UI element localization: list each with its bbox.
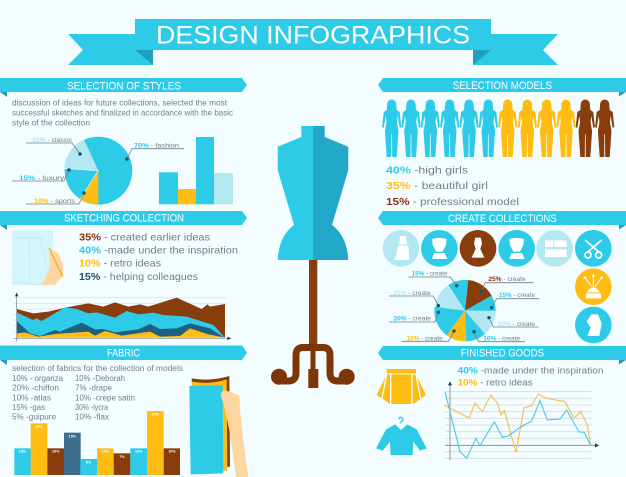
heading ribbon: finished goods: FINISHED GOODS bbox=[461, 348, 544, 360]
pie chart: create: 15% - create bbox=[412, 271, 448, 278]
bar chart: fabrics: 10% bbox=[135, 449, 143, 453]
bar chart: fabrics: 10% bbox=[19, 449, 27, 453]
heading ribbon: fabric: FABRIC bbox=[107, 348, 140, 360]
bar chart: fabrics: 10% bbox=[52, 449, 60, 453]
fabric list: 10% - organza bbox=[12, 374, 64, 383]
fabric list: 10% -crepe satin bbox=[75, 393, 135, 402]
pie chart: create: 25% - create bbox=[488, 276, 526, 283]
panel: selection models bbox=[378, 78, 626, 208]
pie chart: styles: 15% - luxury bbox=[19, 175, 65, 182]
percentages list: 10% - retro ideas bbox=[79, 259, 161, 270]
bar chart: fabrics: 10% bbox=[168, 449, 176, 453]
pie chart: styles: 70% - fashion bbox=[134, 142, 179, 150]
percentages list: 15% - helping colleagues bbox=[79, 272, 198, 283]
icon: skirt bbox=[377, 369, 426, 404]
title: DESIGN INFOGRAPHICS bbox=[156, 22, 470, 50]
heading ribbon: create collections bbox=[378, 211, 626, 230]
stacked area chart bbox=[13, 292, 231, 342]
models percentages: 35% - beautiful girl bbox=[386, 180, 488, 192]
bar chart: fabrics: 30% bbox=[152, 412, 160, 416]
bar chart: fabrics: 20% bbox=[35, 425, 43, 429]
panel: create collections bbox=[378, 211, 626, 343]
bar chart: styles bbox=[159, 137, 233, 204]
heading ribbon: selection models: SELECTION MODELS bbox=[453, 80, 552, 92]
bar chart: fabrics: 5% bbox=[86, 460, 92, 464]
fabric list bbox=[12, 364, 183, 422]
heading ribbon: selection models bbox=[378, 78, 626, 96]
figures row bbox=[382, 100, 614, 157]
pie chart: create: 20% - create bbox=[498, 321, 535, 328]
fabric list: 5% -guipure bbox=[12, 413, 57, 422]
fabric list: 10% -atlas bbox=[12, 393, 51, 402]
title ribbon bbox=[68, 19, 558, 65]
fabric list: 7% -drape bbox=[75, 384, 113, 393]
panel: fabric bbox=[0, 346, 248, 477]
bar chart: fabrics: 10% bbox=[102, 449, 110, 453]
pie chart: create: 10% - create bbox=[483, 335, 520, 342]
bar chart: fabrics bbox=[14, 411, 180, 475]
fabric list: 15% -gas bbox=[12, 403, 45, 412]
pie chart: create: 15% - create bbox=[499, 292, 535, 299]
pie chart: create: 20% - create bbox=[393, 316, 431, 323]
line chart bbox=[444, 381, 599, 460]
pie chart: create: 25% - create bbox=[393, 290, 431, 297]
models percentages: 15% - professional model bbox=[386, 196, 519, 208]
pie chart: styles: 15% - classic bbox=[32, 137, 73, 144]
percentages list: 40% -made under the inspiration bbox=[79, 246, 238, 257]
finished goods percentages: 10% - retro ideas bbox=[458, 377, 533, 388]
bar chart: fabrics: 7% bbox=[119, 455, 125, 459]
finished goods percentages: 40% -made under the inspiration bbox=[458, 365, 604, 376]
heading ribbon: finished goods bbox=[378, 346, 626, 364]
fabric list: 10% -Deborah bbox=[75, 374, 125, 383]
pie chart: create bbox=[389, 271, 539, 342]
panel: sketching collection bbox=[0, 211, 247, 342]
panel: finished goods bbox=[376, 346, 626, 460]
models percentages bbox=[386, 164, 519, 208]
description text: successful sketches and finalized in accordance with the basic bbox=[12, 108, 233, 118]
finished goods percentages bbox=[458, 365, 604, 388]
mannequin bbox=[271, 126, 355, 388]
pie chart: styles bbox=[12, 137, 184, 205]
icons row bbox=[383, 230, 612, 343]
fabric list: 10% -flax bbox=[75, 413, 109, 422]
pie chart: styles: 10% - sports bbox=[34, 198, 76, 205]
icon: hand sketching a skirt bbox=[12, 230, 63, 285]
panel: selection of styles bbox=[0, 78, 247, 205]
icon: fabric swatches in hand bbox=[189, 376, 248, 477]
heading ribbon: create collections: CREATE COLLECTIONS bbox=[448, 213, 557, 225]
description text: style of the collection bbox=[12, 118, 90, 128]
percentages list: 35% - created earlier ideas bbox=[79, 233, 210, 244]
models percentages: 40% -high girls bbox=[386, 164, 468, 176]
fabric list: 30% -lycra bbox=[75, 403, 108, 412]
heading ribbon: sketching collection bbox=[0, 211, 247, 230]
fabric list: selection of fabrics for the collection of models bbox=[12, 364, 183, 373]
heading ribbon: fabric bbox=[0, 346, 247, 365]
description text: discussion of ideas for future collections, selected the most bbox=[12, 98, 228, 108]
heading ribbon: selection of styles bbox=[0, 78, 247, 97]
pie chart: create: 10% - create bbox=[407, 335, 443, 342]
percentages list bbox=[79, 233, 238, 283]
fabric list: 20% -chiffon bbox=[12, 384, 59, 393]
bar chart: fabrics: 15% bbox=[69, 435, 77, 439]
icon: sweater bbox=[376, 417, 427, 455]
heading ribbon: sketching collection: SKETCHING COLLECTION bbox=[64, 213, 184, 225]
heading ribbon: selection of styles: SELECTION OF STYLES bbox=[67, 80, 181, 92]
description text bbox=[12, 98, 233, 128]
